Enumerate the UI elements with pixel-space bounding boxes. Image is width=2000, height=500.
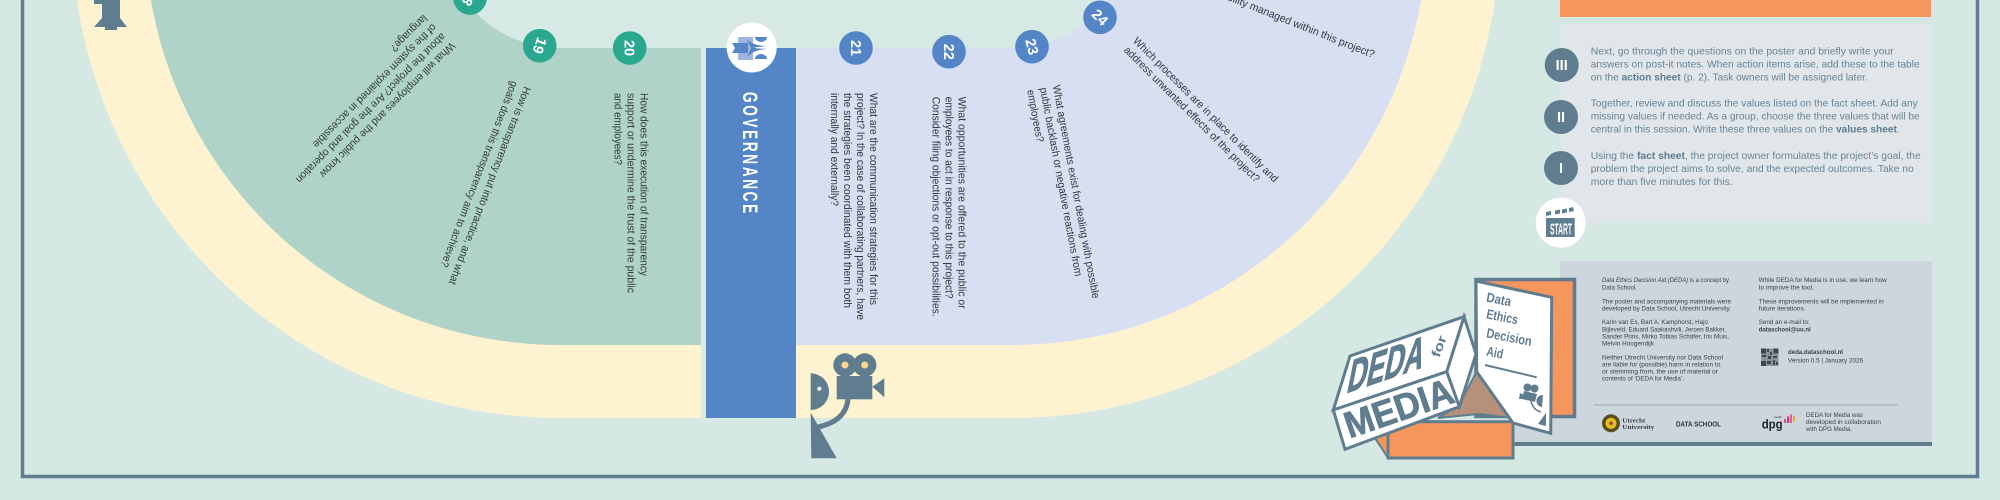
colophon right column: These improvements will be implemented in (1759, 298, 1884, 305)
question 18: about the project? Are the goal and operation (293, 30, 448, 185)
colophon left column: contents of ‘DEDA for Media’. (1602, 376, 1684, 383)
logo: Data School: DATA SCHOOL (1676, 420, 1721, 429)
collaboration note (1805, 412, 1882, 433)
question 24: Which processes are in place to identify and (1130, 35, 1280, 185)
question 24: 24 (1088, 7, 1111, 29)
question 20: 20 (621, 40, 637, 56)
colophon right column: to improve the tool. (1759, 284, 1814, 291)
centre hole (442, 0, 1130, 48)
question 20 (612, 31, 650, 294)
logo: Utrecht University: Utrecht (1622, 418, 1646, 425)
illustration: DEDA booklet and box (1333, 280, 1574, 458)
panel: orange header (1560, 0, 1931, 17)
website and version: deda.dataschool.nl (1788, 349, 1843, 356)
website and version: Version 0.5 | January 2026 (1788, 358, 1864, 365)
panel: instructions (1544, 24, 1932, 222)
booklet front page: Decision (1485, 326, 1533, 349)
panel: transparency (green) (145, 0, 701, 345)
website and version (1788, 349, 1864, 365)
question 18: language? (388, 12, 429, 54)
logo: DPG Media (1762, 414, 1795, 431)
question 24 (1083, 0, 1280, 185)
question 23 (1015, 30, 1101, 300)
logo block: DEDA for MEDIA (1333, 317, 1476, 449)
panel: colophon (1513, 261, 1932, 446)
step III: on the action sheet (p. 2). Task owners will be assigned later. (1591, 72, 1868, 84)
question 21: project? In the case of collaborating partners, have (854, 93, 866, 320)
question 21: 21 (847, 40, 863, 56)
step II: missing values if needed. As a group, choose the three values that will be (1591, 112, 1920, 123)
step II: Together, review and discuss the values listed on the fact sheet. Add any (1591, 99, 1918, 110)
question 20: How does this execution of transparency (638, 93, 650, 277)
step II: II (1557, 110, 1565, 126)
question 22: Consider filing objections or opt-out possibilities. (930, 97, 942, 317)
icon: governance badge (727, 22, 777, 72)
colophon right column: Send an e-mail to: (1759, 319, 1810, 326)
booklet back page (1476, 280, 1574, 416)
question 22: What opportunities are offered to the public or (956, 97, 968, 309)
logo: Utrecht University: University (1622, 424, 1655, 431)
question 20: support or undermine the trust of the public (624, 93, 636, 294)
box interior (1438, 372, 1513, 418)
colophon right column: While DEDA for Media is in use, we learn how (1759, 277, 1887, 284)
booklet front page (1476, 281, 1552, 433)
QR code (1761, 348, 1778, 366)
step I: more than five minutes for this. (1591, 177, 1733, 188)
step III: Next, go through the questions on the poster and briefly write your (1591, 46, 1894, 58)
colophon left column: Data Ethics Decision Aid (DEDA) is a concept by (1602, 277, 1730, 284)
question 19: 19 (528, 35, 549, 56)
booklet front page: Data (1485, 290, 1513, 309)
question 19: How is transparency put into practice, and what (446, 85, 533, 286)
colophon left column: Neither Utrecht University nor Data School (1602, 354, 1723, 361)
logo: DPG Media: media (1774, 415, 1782, 419)
question 22: 22 (940, 44, 956, 60)
colophon right column (1759, 277, 1887, 333)
colophon left column: or stemming from, the use of material or (1602, 369, 1718, 376)
question 20: and employees? (612, 93, 624, 165)
question 19: goals does this transparency aim to achieve? (438, 79, 520, 269)
question 21 (828, 31, 879, 320)
icon: start clapperboard: START (1550, 222, 1572, 239)
question 21: What are the communication strategies for this (867, 93, 879, 306)
question 22: employees to act in response to this project? (943, 97, 955, 299)
question 19 (438, 29, 556, 286)
icon: start clapperboard (1536, 198, 1586, 248)
step I: I (1559, 161, 1563, 177)
colophon left column: Sander Prins, Mirko Tobias Schäfer, Iris Muis, (1602, 333, 1729, 340)
question 23: 23 (1021, 37, 1041, 57)
icon: mini camera figure (1519, 384, 1546, 426)
logo: Utrecht University (1602, 414, 1655, 432)
step II: central in this session. Write these three values on the values sheet. (1591, 125, 1900, 136)
box front (1388, 422, 1513, 458)
question 18: What will employees and the public know (317, 40, 457, 180)
colophon left column (1602, 277, 1732, 383)
question 21: internally and externally? (828, 93, 840, 206)
step I: Using the fact sheet, the project owner formulates the project’s goal, the (1591, 151, 1921, 162)
logo: DPG Media: dpg (1762, 416, 1783, 431)
logo block: DEDA for MEDIA: DEDA (1344, 325, 1430, 404)
colophon left column: Bijleveld, Eduard Saakashvili, Jeroen Bakker, (1602, 326, 1726, 333)
logo block: DEDA for MEDIA: for (1428, 334, 1450, 359)
panel: governance (lavender) (796, 0, 1427, 345)
booklet front page: Ethics (1485, 307, 1519, 327)
icon: film camera figure (811, 353, 884, 458)
colophon left column: developed by Data School, Utrecht University. (1602, 306, 1731, 313)
collaboration note: developed in collaboration (1806, 419, 1882, 426)
box side flap (1375, 422, 1388, 457)
question 18 (293, 0, 487, 185)
step III: III (1556, 58, 1568, 74)
step II (1544, 99, 1920, 136)
step I: problem the project aims to solve, and the expected outcomes. Take no (1591, 164, 1914, 175)
collaboration note: DEDA for Media was (1806, 412, 1863, 419)
step I (1544, 151, 1921, 188)
step III (1545, 46, 1920, 84)
question 23: public backlash or negative reactions from (1037, 86, 1084, 277)
question 24: address unwanted effects of the project? (1121, 44, 1262, 185)
colophon left column: Data School. (1602, 284, 1637, 291)
cream track (72, 0, 1500, 418)
governance bar (706, 48, 796, 418)
heading: governance: GOVERNANCE (738, 92, 762, 216)
booklet front page: Aid (1485, 344, 1505, 362)
question 23: employees? (1024, 89, 1046, 143)
question 22 (930, 35, 968, 317)
colophon left column: Karin van Es, Bart A. Kamphorst, Hajo (1602, 319, 1709, 326)
step III: answers on post-it notes. When action items arise, add these to the table (1591, 60, 1920, 70)
colophon right column: future iterations. (1759, 306, 1806, 313)
logo block: DEDA for MEDIA: MEDIA (1339, 371, 1459, 446)
question 21: the strategies been coordinated with them both (841, 93, 853, 308)
colophon left column: are liable for (possible) harm in relation to, (1602, 361, 1722, 368)
icon: tower at top left (94, 0, 127, 30)
question 18: of the system explained in accessible (310, 21, 439, 150)
question 23: What agreements exist for dealing with possible (1050, 84, 1101, 300)
gap between sections (701, 48, 706, 418)
colophon left column: The poster and accompanying materials were (1602, 298, 1732, 305)
colophon left column: Melvin Hoogendijk (1602, 341, 1655, 348)
colophon right column: dataschool@uu.nl (1759, 326, 1811, 333)
collaboration note: with DPG Media. (1805, 426, 1852, 433)
